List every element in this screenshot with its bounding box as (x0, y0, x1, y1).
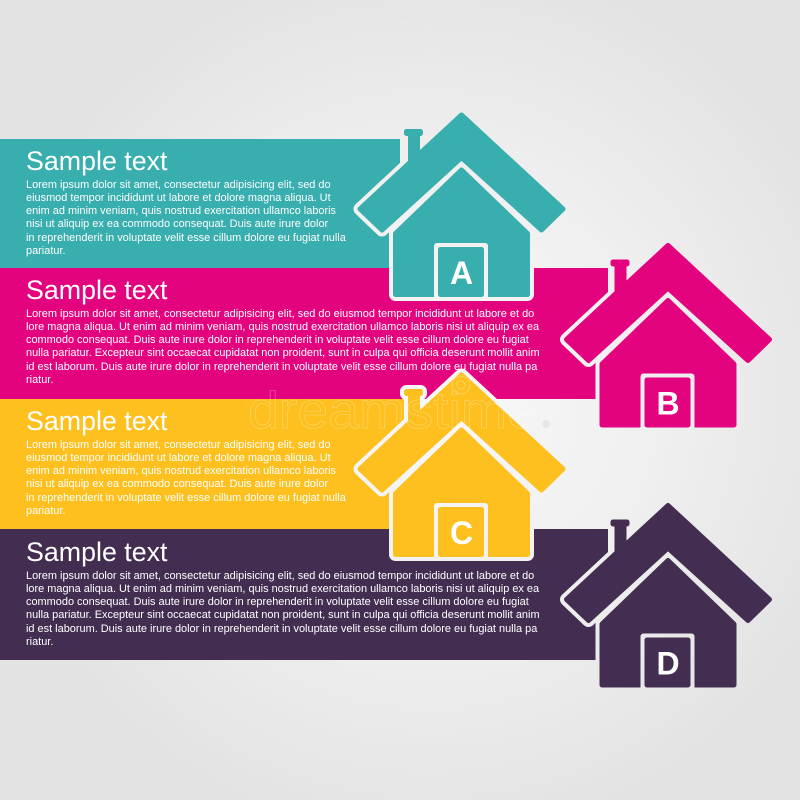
panel: D (0, 506, 770, 692)
icon: house C (360, 375, 563, 561)
band: yellow (0, 399, 420, 529)
text block B: lore magna aliqua. Ut enim ad minim veniam, quis nostrud exercitation ullamco laboris nisi ut aliquip ex ea (26, 321, 540, 333)
text block C: in reprehenderit in voluptate velit esse cillum dolore eu fugiat nulla (26, 492, 347, 504)
band: magenta (0, 268, 608, 399)
icon: house D (566, 506, 770, 692)
text block C (26, 439, 347, 517)
text block C: eiusmod tempor incididunt ut labore et dolore magna aliqua. Ut (26, 452, 331, 464)
text block B: id est laborum. Duis aute irure dolor in reprehenderit in voluptate velit esse cillum dolore eu fugiat nulla pa (26, 361, 538, 373)
band: purple (0, 529, 608, 660)
text block C: Lorem ipsum dolor sit amet, consectetur adipisicing elit, sed do (26, 439, 331, 451)
heading D: Sample text (26, 537, 168, 567)
text block B: nulla pariatur. Excepteur sint occaecat cupidatat non proident, sunt in culpa qui officia deserunt mollit anim (26, 347, 540, 359)
panel: C (0, 375, 563, 561)
text block C: enim ad minim veniam, quis nostrud exercitation ullamco laboris (26, 465, 337, 477)
icon: house C: C (450, 515, 473, 551)
text block C: pariatur. (26, 505, 66, 517)
text block D: commodo consequat. Duis aute irure dolor in reprehenderit in voluptate velit esse cillum dolore eu fugiat (26, 596, 529, 608)
icon: house D: D (656, 646, 680, 682)
icon: house A: A (450, 255, 473, 291)
band: teal (0, 139, 400, 268)
text block A: enim ad minim veniam, quis nostrud exercitation ullamco laboris (26, 205, 337, 217)
heading B: Sample text (26, 275, 168, 305)
text block A: nisi ut aliquip ex ea commodo consequat. Duis aute irure dolor (26, 218, 329, 230)
text block A: in reprehenderit in voluptate velit esse cillum dolore eu fugiat nulla (26, 232, 347, 244)
text block D: lore magna aliqua. Ut enim ad minim veniam, quis nostrud exercitation ullamco laboris nisi ut aliquip ex ea (26, 583, 540, 595)
text block D: nulla pariatur. Excepteur sint occaecat cupidatat non proident, sunt in culpa qui officia deserunt mollit anim (26, 609, 540, 621)
text block B: riatur. (26, 374, 53, 386)
panel: A (0, 115, 563, 301)
text block B (26, 308, 540, 386)
text block B: commodo consequat. Duis aute irure dolor in reprehenderit in voluptate velit esse cillum dolore eu fugiat (26, 334, 529, 346)
text block A: pariatur. (26, 245, 66, 257)
heading C: Sample text (26, 406, 168, 436)
text block D: Lorem ipsum dolor sit amet, consectetur adipisicing elit, sed do eiusmod tempor incididunt ut labore et do (26, 570, 534, 582)
watermark: dreamstime (248, 382, 538, 440)
icon: house B (566, 246, 770, 432)
text block A: Lorem ipsum dolor sit amet, consectetur adipisicing elit, sed do (26, 179, 331, 191)
icon: house A (360, 115, 563, 301)
text block D (26, 570, 540, 648)
text block B: Lorem ipsum dolor sit amet, consectetur adipisicing elit, sed do eiusmod tempor incididunt ut labore et do (26, 308, 534, 320)
icon: house B: B (656, 386, 680, 422)
heading A: Sample text (26, 146, 168, 176)
text block D: riatur. (26, 636, 53, 648)
text block A (26, 179, 347, 257)
text block A: eiusmod tempor incididunt ut labore et dolore magna aliqua. Ut (26, 192, 331, 204)
text block D: id est laborum. Duis aute irure dolor in reprehenderit in voluptate velit esse cillum dolore eu fugiat nulla pa (26, 623, 538, 635)
text block C: nisi ut aliquip ex ea commodo consequat. Duis aute irure dolor (26, 478, 329, 490)
panel: B (0, 246, 770, 432)
